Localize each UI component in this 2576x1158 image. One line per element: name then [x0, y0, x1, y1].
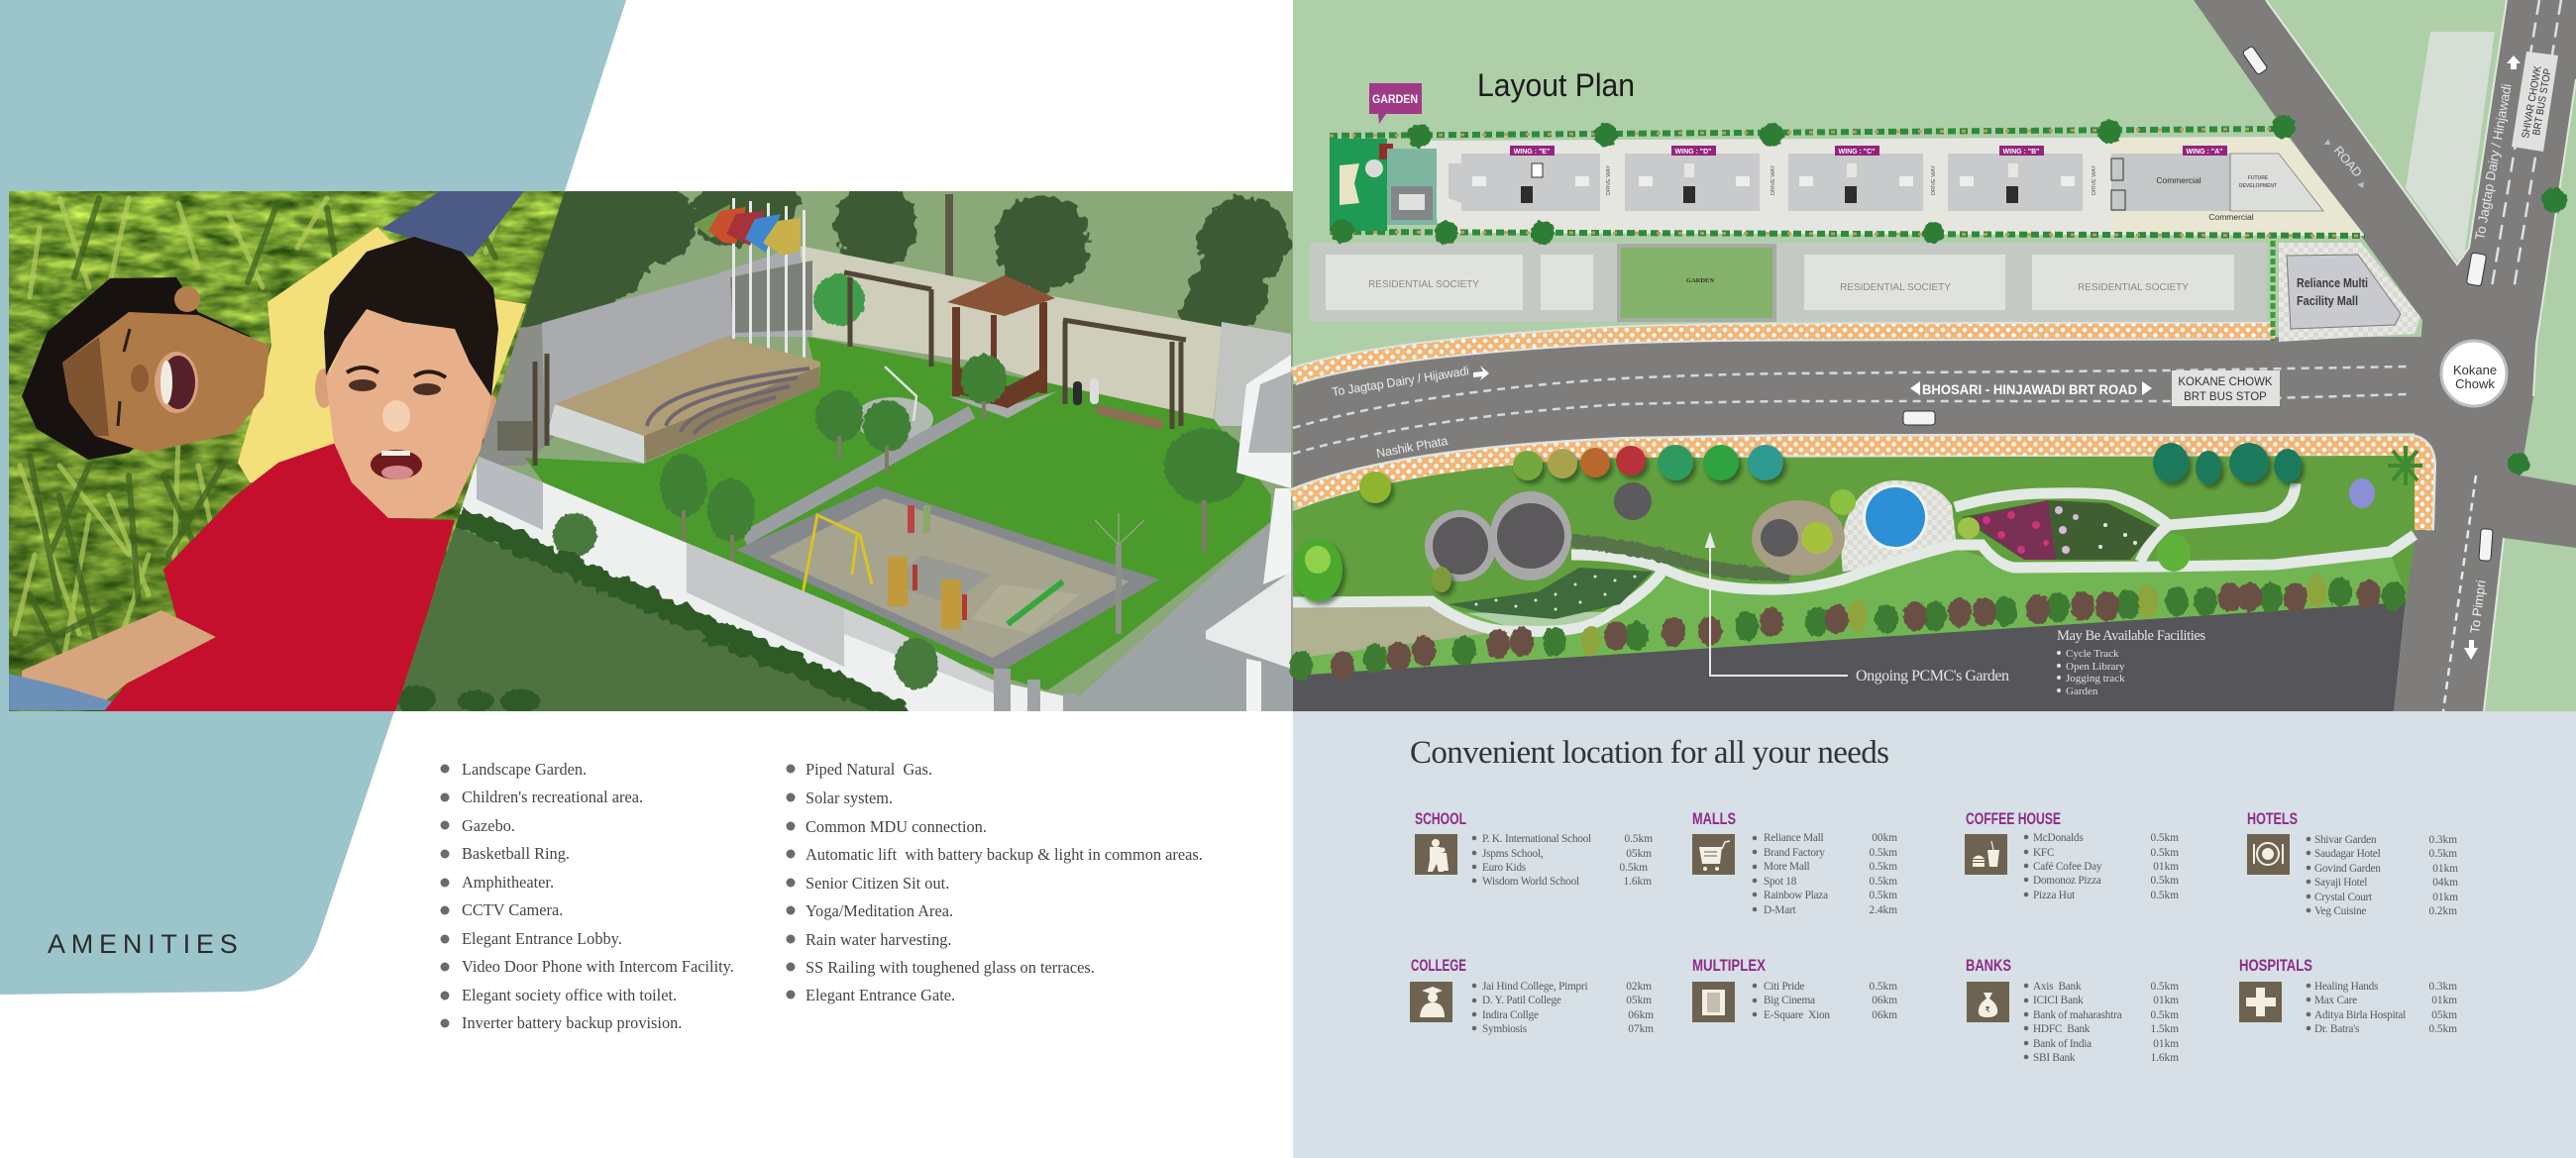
boy in red: arm — [22, 610, 216, 700]
project plot — [1330, 115, 2365, 245]
block: malls: MALLS — [1692, 809, 1736, 828]
block: coffee house: 0.5km — [2150, 832, 2179, 844]
block: school: Euro Kids — [1482, 862, 1526, 874]
paving — [1063, 522, 1293, 711]
block: multiplex: 06km — [1872, 995, 1897, 1006]
block: hotels: Veg Cuisine — [2314, 905, 2366, 917]
text: available facilities: Garden — [2066, 685, 2098, 697]
block: college: 02km — [1626, 981, 1652, 993]
paved path — [744, 412, 972, 539]
heading: convenient location: Convenient location for all your needs — [1410, 735, 1889, 771]
basketball area — [854, 367, 933, 441]
wing A commercial: FUTURE — [2248, 175, 2269, 181]
block: hotels: Sayaji Hotel — [2314, 877, 2367, 889]
list: amenities column one: Children's recreational area. — [462, 788, 643, 806]
corner pavement — [2279, 243, 2420, 342]
block: coffee house: COFFEE HOUSE — [1966, 809, 2061, 828]
residential societies: RESIDENTIAL SOCIETY — [1840, 282, 1951, 293]
roundabout: Kokane Chowk: Kokane — [2453, 363, 2497, 377]
road label: to Pimpri — [2464, 579, 2489, 660]
block: hotels: 01km — [2432, 892, 2458, 903]
garden trees — [660, 355, 1247, 542]
play area — [736, 486, 1159, 672]
block: banks: HDFC Bank — [2033, 1023, 2091, 1035]
coloured trees left — [1293, 445, 1783, 601]
grass shading — [9, 263, 533, 711]
pool — [1863, 484, 1928, 550]
block: malls: D-Mart — [1764, 904, 1796, 916]
icon: film — [1692, 982, 1735, 1022]
list: amenities column two: SS Railing with toughened glass on terraces. — [805, 958, 1095, 977]
block: malls: 2.4km — [1869, 904, 1897, 916]
list: amenities column two: Automatic lift with battery backup & light in common areas. — [805, 845, 1203, 864]
society garden: GARDEN — [1686, 277, 1714, 284]
block: college: D. Y. Patil College — [1482, 995, 1561, 1006]
block: hotels: 0.3km — [2428, 834, 2457, 846]
block: hospitals: 0.3km — [2428, 981, 2457, 993]
sign: Kokane Chowk bus stop — [2172, 370, 2280, 406]
text: available facilities — [2057, 628, 2205, 697]
wing A commercial: Commercial — [2156, 175, 2201, 185]
sign: Shivar Chowk bus stop: BRT BUS STOP — [2530, 67, 2554, 137]
block: malls: Rainbow Plaza — [1764, 890, 1828, 901]
list: amenities column two: Piped Natural Gas. — [805, 760, 932, 779]
block: school: P. K. International School — [1482, 833, 1591, 845]
wing E: DRIVE WAY — [1606, 165, 1612, 195]
wing B: DRIVE WAY — [2092, 165, 2097, 195]
boy in red: shirt — [104, 443, 455, 711]
list: amenities column two — [787, 760, 1203, 1004]
wing E: WING : "E" — [1514, 149, 1550, 156]
boundary wall grey — [542, 251, 812, 421]
block: hospitals: Dr. Batra's — [2314, 1023, 2359, 1035]
building — [1206, 355, 1291, 711]
flower strip — [1571, 541, 1789, 575]
sign: Kokane Chowk bus stop: BRT BUS STOP — [2184, 391, 2267, 403]
block: school: 1.6km — [1623, 876, 1652, 888]
block: school: 05km — [1626, 848, 1652, 860]
boy in yellow: shirt — [238, 227, 526, 503]
block: banks: 1.6km — [2150, 1052, 2179, 1064]
block: hotels: Crystal Court — [2314, 892, 2373, 903]
reliance mall: Reliance Multi — [2297, 275, 2368, 290]
dark asphalt — [1293, 602, 2406, 711]
road label: ROAD — [2324, 139, 2365, 188]
front wall — [455, 456, 1077, 711]
block: banks: 0.5km — [2150, 1009, 2179, 1021]
block: banks — [1966, 956, 2179, 1064]
block: banks: 01km — [2153, 1038, 2179, 1050]
panel: layout plan map — [1289, 0, 2576, 1158]
wing A commercial: DEVELOPMENT — [2239, 183, 2277, 189]
amphitheatre — [547, 337, 820, 464]
block: hotels: Shivar Garden — [2314, 834, 2377, 846]
block: hotels: 01km — [2432, 863, 2458, 875]
icon: cart — [1692, 834, 1735, 875]
bench — [1097, 404, 1162, 430]
block: multiplex: MULTIPLEX — [1692, 956, 1767, 975]
block: banks: Bank of maharashtra — [2033, 1009, 2122, 1021]
block: college: Jai Hind College, Pimpri — [1482, 981, 1587, 993]
block: coffee house: McDonalds — [2033, 832, 2083, 844]
panel: convenient location — [1293, 711, 2576, 1158]
list: amenities column one — [440, 760, 734, 1032]
top hedge — [1330, 129, 2279, 136]
wall recess — [730, 261, 812, 333]
block: coffee house: Café Cofee Day — [2033, 861, 2102, 873]
pergolas — [535, 272, 1186, 466]
foreground lawn — [395, 526, 910, 711]
callout: garden — [1369, 83, 1422, 124]
icon: medical cross — [2239, 982, 2282, 1022]
block: college: Symbiosis — [1482, 1023, 1527, 1035]
block: hospitals: 05km — [2431, 1009, 2457, 1021]
icon: graduate — [1410, 982, 1452, 1022]
block: school — [1415, 809, 1653, 888]
sign: Shivar Chowk bus stop: SHIVAR CHOWK — [2520, 65, 2544, 140]
boy in red: head — [315, 237, 499, 518]
block: banks: Bank of India — [2033, 1038, 2092, 1050]
block: malls: Brand Factory — [1764, 847, 1825, 859]
block: college: COLLEGE — [1411, 956, 1466, 975]
residential societies: RESIDENTIAL SOCIETY — [2078, 282, 2189, 293]
block: school: 0.5km — [1624, 833, 1653, 845]
list: amenities column one: Elegant society office with toilet. — [462, 986, 677, 1004]
road label: to Jagtap Dairy left: To Jagtap Dairy / Hijawadi — [1331, 364, 1470, 399]
block: multiplex: E-Square Xion — [1764, 1009, 1830, 1021]
block: coffee house: 01km — [2153, 861, 2179, 873]
boundary wall right — [1214, 322, 1291, 426]
block: multiplex: Big Cinema — [1764, 995, 1815, 1006]
block: school: 0.5km — [1619, 862, 1648, 874]
lower footpath band — [1293, 446, 2424, 530]
block: hotels: Saudagar Hotel — [2314, 848, 2381, 860]
wing A commercial: Commercial — [2208, 212, 2254, 222]
small plants right — [1958, 446, 2422, 572]
block: malls: Reliance Mall — [1764, 832, 1824, 844]
block: hospitals: Max Care — [2314, 995, 2357, 1006]
seated people — [1073, 378, 1099, 405]
dry tree — [1095, 513, 1144, 634]
block: coffee house: 0.5km — [2150, 875, 2179, 887]
flags — [694, 204, 801, 256]
wing B: WING : "B" — [2003, 149, 2039, 156]
block: hotels: Govind Garden — [2314, 863, 2381, 875]
block: coffee house: Pizza Hut — [2033, 890, 2076, 901]
list: amenities column two: Rain water harvesting. — [805, 930, 952, 949]
block: malls: More Mall — [1764, 861, 1809, 873]
block: multiplex: Citi Pride — [1764, 981, 1804, 993]
hedge by society — [2271, 241, 2275, 341]
label: ongoing PCMC's garden: Ongoing PCMC's Garden — [1856, 668, 2009, 684]
block: hotels: 0.5km — [2428, 848, 2457, 860]
residential societies — [1310, 243, 2267, 322]
gazebo — [947, 275, 1057, 418]
sign: Shivar Chowk bus stop — [2512, 52, 2558, 152]
list: amenities column one: Amphitheater. — [462, 873, 554, 892]
wing D — [1625, 146, 1776, 211]
block: coffee house: 0.5km — [2150, 847, 2179, 859]
seating circle — [1752, 489, 1856, 576]
block: college: 05km — [1626, 995, 1652, 1006]
wing C: DRIVE WAY — [1931, 165, 1937, 195]
list: amenities column one: Elegant Entrance Lobby. — [462, 929, 622, 948]
block: multiplex: 06km — [1872, 1009, 1897, 1021]
flower bed with white dots — [1449, 568, 1653, 619]
block: hospitals: Healing Hands — [2314, 981, 2378, 993]
block: multiplex: 0.5km — [1869, 981, 1897, 993]
reliance mall: Facility Mall — [2297, 293, 2358, 308]
road label: BRT road: BHOSARI - HINJAWADI BRT ROAD — [1922, 381, 2137, 397]
wing D: WING : "D" — [1675, 149, 1711, 156]
panel: amenities page — [0, 0, 1293, 1032]
icon: money bag: ₹ — [1985, 1005, 1990, 1014]
road label: Nashik Phata: Nashik Phata — [1375, 434, 1449, 461]
pale plot beside road — [2406, 32, 2495, 261]
sign: Kokane Chowk bus stop: KOKANE CHOWK — [2178, 376, 2273, 388]
wing C: WING : "C" — [1839, 149, 1875, 156]
block: school: SCHOOL — [1415, 809, 1466, 828]
block: college: Indira Collge — [1482, 1009, 1539, 1021]
grass blades — [15, 198, 505, 684]
icon: burger and drink — [1965, 834, 2007, 875]
block: college — [1410, 956, 1654, 1035]
plot garden — [1330, 139, 1437, 231]
wing D: DRIVE WAY — [1771, 165, 1776, 195]
society garden — [1617, 244, 1776, 322]
road edge lines — [2266, 0, 2576, 711]
block: hospitals: HOSPITALS — [2239, 956, 2312, 975]
block: banks: SBI Bank — [2033, 1052, 2076, 1064]
ongoing garden — [1289, 46, 2567, 711]
hedge — [457, 516, 907, 715]
block: banks: 0.5km — [2150, 981, 2179, 993]
block: banks: 01km — [2153, 995, 2179, 1006]
walking paths — [1293, 483, 2415, 631]
teal trees right — [2153, 443, 2302, 484]
block: malls — [1692, 809, 1897, 916]
reliance mall — [2287, 255, 2401, 329]
lower lawn — [1293, 545, 2406, 684]
wing A commercial — [2111, 146, 2323, 222]
block: banks: BANKS — [1966, 956, 2011, 975]
block: hospitals: 01km — [2431, 995, 2457, 1006]
photo: laughing children — [9, 191, 569, 711]
khaki patch — [1293, 607, 1497, 659]
block: banks: 1.5km — [2150, 1023, 2179, 1035]
flag poles — [732, 198, 805, 361]
block: multiplex — [1692, 956, 1897, 1022]
block: banks: Axis Bank — [2033, 981, 2082, 993]
background trees — [520, 191, 1292, 328]
road label: to Pimpri: To Pimpri — [2467, 579, 2489, 634]
cars — [1903, 46, 2493, 561]
hedge row — [1289, 575, 2406, 681]
block: college: 07km — [1628, 1023, 1654, 1035]
residential societies: RESIDENTIAL SOCIETY — [1368, 279, 1479, 290]
heading: amenities: AMENITIES — [48, 929, 242, 959]
block: malls: 00km — [1872, 832, 1897, 844]
wing E — [1449, 146, 1612, 211]
list: amenities column one: Basketball Ring. — [462, 844, 570, 863]
icon: money bag — [1967, 982, 2009, 1022]
heading: layout plan: Layout Plan — [1477, 67, 1635, 103]
foreground bushes — [396, 685, 540, 713]
text: available facilities: May Be Available Facilities — [2057, 628, 2205, 644]
photo: garden render — [395, 177, 1293, 715]
pool surround — [1842, 480, 1957, 572]
left backdrop — [476, 323, 555, 466]
block: malls: 0.5km — [1869, 890, 1897, 901]
road label: ROAD: ROAD — [2331, 144, 2365, 180]
callout: garden: GARDEN — [1372, 94, 1418, 106]
road lane dashes — [1293, 0, 2561, 711]
wing B — [1948, 146, 2097, 211]
block: coffee house: KFC — [2033, 847, 2054, 859]
block: coffee house — [1965, 809, 2179, 901]
lawn — [525, 337, 1271, 690]
boundary wall cream — [800, 246, 1222, 419]
upper lawn — [1293, 456, 2415, 614]
roundabout: Kokane Chowk — [2441, 341, 2507, 406]
plot trees — [1331, 115, 2296, 245]
block: malls: 0.5km — [1869, 861, 1897, 873]
roadside trees — [2508, 187, 2567, 474]
list: amenities column two: Solar system. — [805, 789, 893, 807]
list: amenities column two: Senior Citizen Sit out. — [805, 874, 949, 893]
arrow: ongoing garden pointer — [1706, 535, 1848, 676]
block: school: Wisdom World School — [1482, 876, 1579, 888]
list: amenities column one: Landscape Garden. — [462, 760, 587, 779]
block: hotels — [2247, 809, 2458, 917]
block: hospitals: Aditya Birla Hospital — [2314, 1009, 2406, 1021]
block: hospitals: 0.5km — [2428, 1023, 2457, 1035]
boy in red: jeans — [9, 674, 112, 710]
road label: to Jagtap Dairy right: To Jagtap Dairy / Hinjawadi — [2472, 82, 2515, 242]
boy in yellow: head — [22, 277, 269, 460]
text: available facilities: Open Library — [2066, 661, 2125, 673]
text: available facilities: Jogging track — [2066, 673, 2125, 684]
list: amenities column one: CCTV Camera. — [462, 900, 563, 919]
boy in yellow: sleeve — [381, 191, 524, 257]
wing C — [1788, 146, 1937, 211]
block: college: 06km — [1628, 1009, 1654, 1021]
paved circles — [1425, 482, 1652, 581]
block: banks: ICICI Bank — [2033, 995, 2084, 1006]
top footpath band — [1293, 331, 2275, 376]
icon: plate and cutlery — [2247, 834, 2290, 875]
block: hospitals — [2239, 956, 2457, 1035]
list: amenities column one: Gazebo. — [462, 816, 515, 835]
list: amenities column one: Inverter battery backup provision. — [462, 1013, 682, 1032]
icon: children — [1415, 834, 1457, 875]
block: coffee house: Domonoz Pizza — [2033, 875, 2101, 887]
text: available facilities: Cycle Track — [2066, 648, 2119, 660]
block: hotels: 04km — [2432, 877, 2458, 889]
block: hotels: 0.2km — [2428, 905, 2457, 917]
wing A commercial: WING : "A" — [2187, 149, 2222, 156]
seating left — [497, 421, 533, 451]
bottom hedge — [1330, 232, 2365, 236]
teal band — [0, 0, 626, 995]
list: amenities column two: Yoga/Meditation Area. — [805, 901, 953, 920]
block: coffee house: 0.5km — [2150, 890, 2179, 901]
colorful flower bed — [1962, 500, 2157, 560]
block: malls: Spot 18 — [1764, 876, 1797, 888]
list: amenities column two: Elegant Entrance Gate. — [805, 986, 955, 1004]
list: amenities column one: Video Door Phone with Intercom Facility. — [462, 957, 734, 976]
block: malls: 0.5km — [1869, 847, 1897, 859]
list: amenities column two: Common MDU connection. — [805, 817, 987, 836]
block: malls: 0.5km — [1869, 876, 1897, 888]
block: school: Jspms School, — [1482, 848, 1544, 860]
roundabout: Kokane Chowk: Chowk — [2455, 376, 2495, 391]
road network — [1293, 0, 2576, 711]
block: hotels: HOTELS — [2247, 809, 2298, 828]
shrub — [813, 274, 865, 326]
